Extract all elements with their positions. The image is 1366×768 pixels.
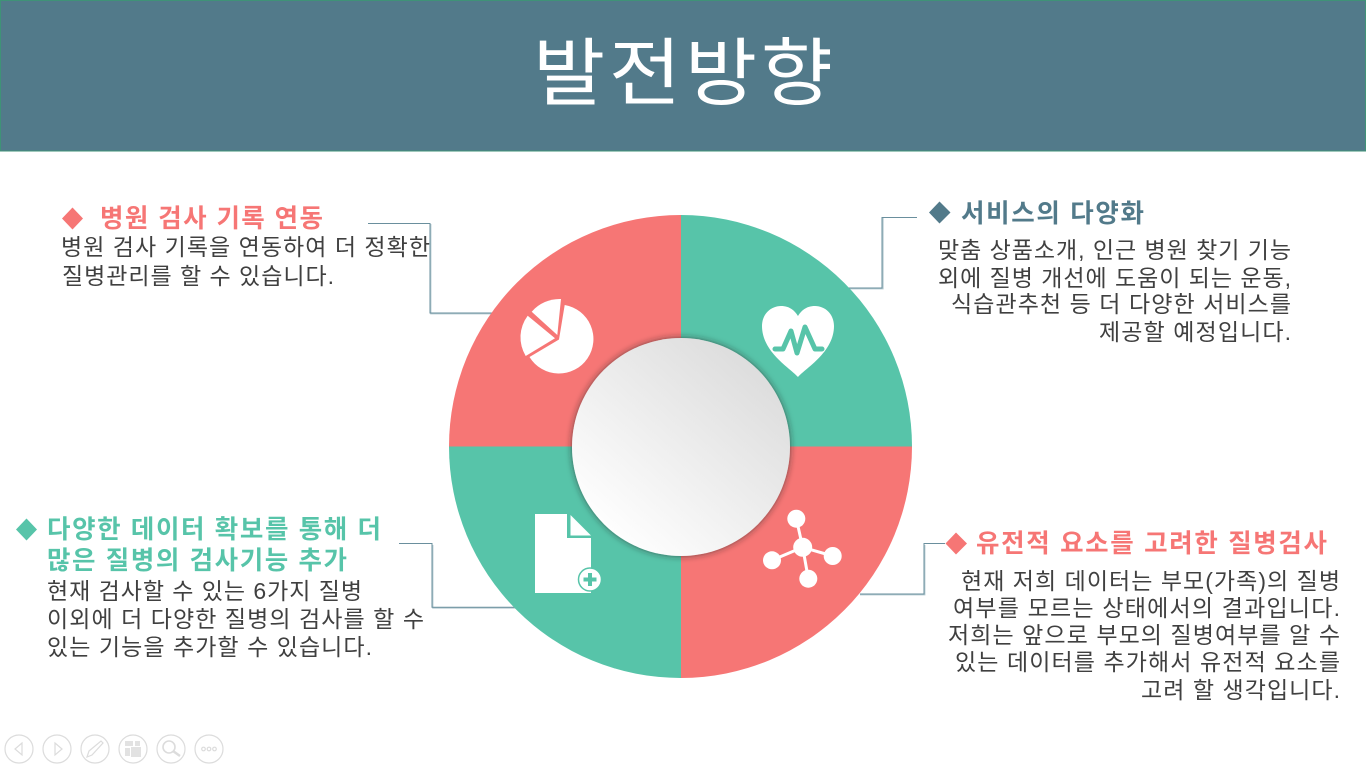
body: 제공할 예정입니다.: [1099, 319, 1291, 345]
heading: 유전적 요소를 고려한 질병검사: [976, 530, 1327, 558]
bullet diamond: [946, 532, 967, 554]
body: 질병관리를 할 수 있습니다.: [62, 263, 334, 289]
body: 외에 질병 개선에 도움이 되는 운동,: [938, 265, 1291, 291]
connector: top left: [368, 224, 492, 314]
heading: 많은 질병의 검사기능 추가: [47, 547, 347, 575]
text block: bottom left: [16, 516, 424, 660]
body: [948, 568, 1340, 703]
body: 여부를 모르는 상태에서의 결과입니다.: [953, 595, 1340, 621]
body: 있는 데이터를 추가해서 유전적 요소를: [955, 649, 1340, 675]
control: zoom: [157, 735, 185, 763]
body: 고려 할 생각입니다.: [1141, 677, 1340, 703]
body: 병원 검사 기록을 연동하여 더 정확한: [61, 234, 430, 260]
body: 현재 저희 데이터는 부모(가족)의 질병: [961, 568, 1340, 594]
heading: 서비스의 다양화: [961, 200, 1144, 228]
body: 저희는 앞으로 부모의 질병여부를 알 수: [948, 622, 1340, 648]
connector: bottom left: [399, 544, 517, 608]
icon: molecule network: [763, 510, 842, 588]
title: 발전방향: [533, 33, 833, 115]
bullet diamond: [16, 518, 37, 540]
body: 있는 기능을 추가할 수 있습니다.: [47, 634, 372, 660]
icon: document with plus: [535, 514, 602, 593]
body: 현재 검사할 수 있는 6가지 질병: [47, 578, 362, 604]
connector: top right: [846, 218, 917, 289]
text block: bottom right: [946, 530, 1340, 703]
text block: top right: [929, 200, 1291, 345]
control: pen: [81, 735, 109, 763]
donut chart: [449, 215, 912, 678]
quadrant: bottom right: [681, 446, 912, 678]
control: slides: [119, 735, 147, 763]
heading: [47, 516, 381, 575]
quadrant: top left: [449, 215, 681, 446]
heading: 병원 검사 기록 연동: [100, 205, 323, 233]
body: 식습관추천 등 더 다양한 서비스를: [951, 291, 1291, 317]
center circle: [572, 338, 790, 556]
body: [938, 237, 1291, 345]
icon: heart with pulse: [762, 306, 834, 377]
connector: bottom right: [860, 544, 945, 595]
control: more: [195, 735, 223, 763]
body: [61, 234, 430, 289]
icon: pie chart: [520, 299, 593, 374]
quadrant: bottom left: [449, 446, 681, 678]
control: previous: [5, 735, 33, 763]
text block: top left: [61, 205, 430, 289]
bullet diamond: [62, 208, 83, 230]
quadrant: top right: [681, 215, 912, 446]
control: next: [43, 735, 71, 763]
heading: 다양한 데이터 확보를 통해 더: [47, 516, 381, 544]
body: 이외에 더 다양한 질병의 검사를 할 수: [47, 606, 424, 632]
slideshow controls: [5, 735, 223, 763]
body: 맞춤 상품소개, 인근 병원 찾기 기능: [938, 237, 1291, 263]
header banner: [0, 0, 1366, 151]
bullet diamond: [929, 202, 950, 224]
body: [47, 578, 424, 660]
